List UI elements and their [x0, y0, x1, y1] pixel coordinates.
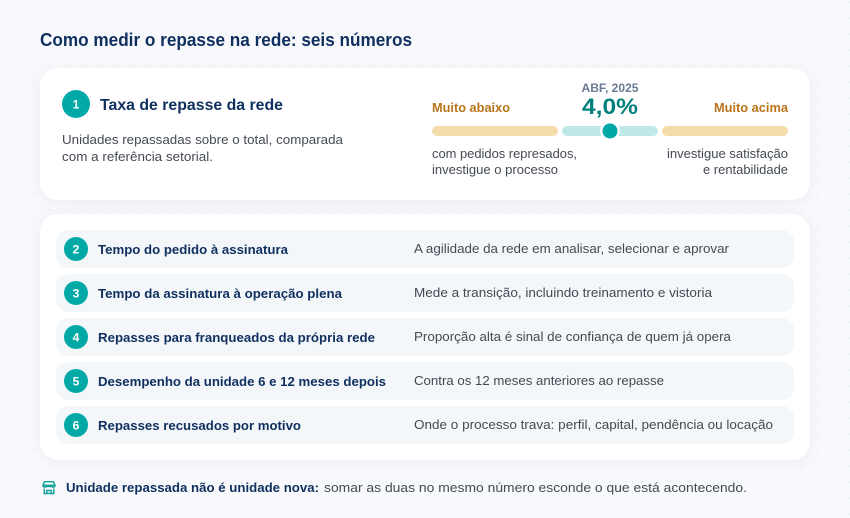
row 5: Desempenho da unidade 6 e 12 meses depois [98, 374, 386, 389]
label: muito abaixo: Muito abaixo [432, 101, 510, 115]
icon: number 1 badge: 1 [73, 98, 80, 112]
row 6: Repasses recusados por motivo [98, 418, 301, 433]
text block: low note: investigue o processo [432, 163, 558, 177]
row 5: Contra os 12 meses anteriores ao repasse [414, 374, 664, 388]
row 4: Proporção alta é sinal de confiança de quem já opera [414, 330, 731, 344]
panel: taxa de repasse [40, 68, 810, 200]
row 3: Tempo da assinatura à operação plena [98, 286, 343, 301]
row 2: A agilidade da rede em analisar, selecionar e aprovar [414, 242, 729, 256]
row 2: Tempo do pedido à assinatura [98, 242, 289, 257]
chart: range scale [432, 121, 788, 141]
row 2: 2 [73, 242, 80, 256]
heading: taxa de repasse da rede: Taxa de repasse da rede [100, 97, 283, 114]
text block: low note: com pedidos represados, [432, 147, 577, 161]
text block: high note: e rentabilidade [703, 163, 788, 177]
title: Como medir o repasse na rede: seis números [40, 30, 412, 50]
text block: description: Unidades repassadas sobre o total, comparada [62, 133, 343, 147]
row 2 [56, 230, 794, 268]
row 4: 4 [73, 330, 80, 344]
callout: footer note: somar as duas no mesmo número esconde o que está acontecendo. [324, 480, 747, 495]
row 3: Mede a transição, incluindo treinamento e vistoria [414, 286, 712, 300]
row 6: 6 [73, 418, 80, 432]
label: source: ABF, 2025 [582, 83, 639, 95]
row 5 [56, 362, 794, 400]
row 4: Repasses para franqueados da própria rede [98, 330, 375, 345]
panel: demais números [40, 214, 810, 460]
callout: footer note [66, 480, 747, 495]
row 4 [56, 318, 794, 356]
row 6 [56, 406, 794, 444]
icon: number 1 badge [62, 90, 90, 118]
label: muito acima: Muito acima [714, 101, 789, 115]
value: 4,0%: 4,0% [582, 94, 638, 119]
text block: low note [432, 147, 577, 177]
row 3 [56, 274, 794, 312]
text block: description [62, 133, 343, 164]
text block: description: com a referência setorial. [62, 150, 213, 164]
icon: store [43, 482, 55, 494]
callout: footer note: Unidade repassada não é unidade nova: [66, 480, 319, 495]
row 5: 5 [73, 374, 80, 388]
text block: high note [667, 147, 788, 177]
text block: high note: investigue satisfação [667, 147, 788, 161]
row 3: 3 [73, 286, 80, 300]
row 6: Onde o processo trava: perfil, capital, pendência ou locação [414, 418, 773, 432]
